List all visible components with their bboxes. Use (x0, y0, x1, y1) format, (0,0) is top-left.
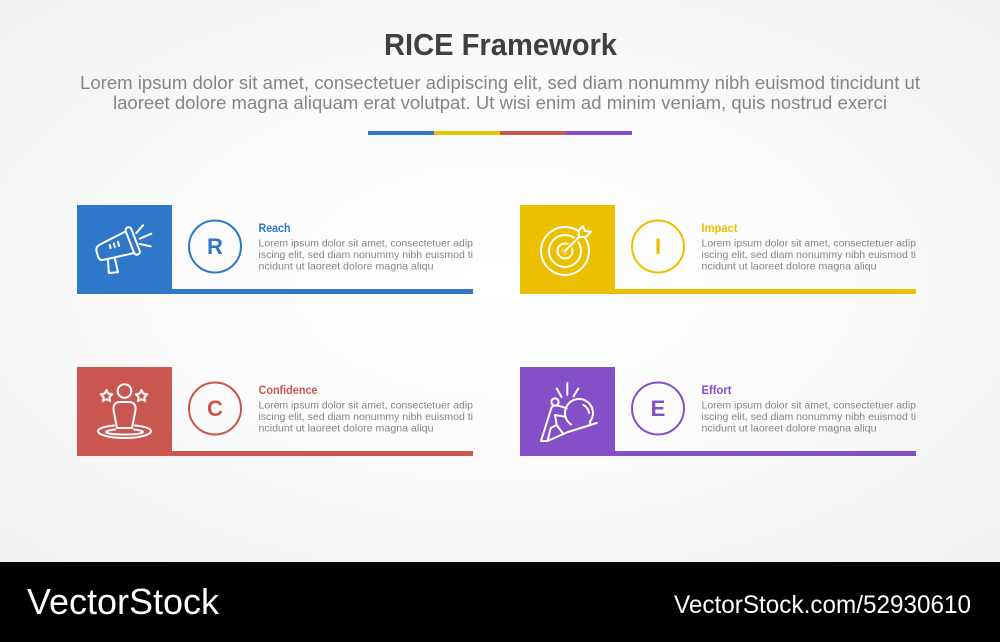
impact text: Lorem ipsum dolor sit amet, consectetuer adip (702, 238, 916, 250)
title: RICE Framework (384, 27, 618, 62)
subtitle text: Lorem ipsum dolor sit amet, consectetuer adipiscing elit, sed diam nonummy nibh euismod tincidunt ut (80, 72, 920, 93)
effort text: Lorem ipsum dolor sit amet, consectetuer adip (702, 400, 916, 412)
effort text: ncidunt ut laoreet dolore magna aliqu (702, 422, 877, 434)
footer url text: VectorStock.com/52930610 (674, 591, 971, 619)
letter circle C (189, 382, 241, 434)
icon: megaphone (96, 225, 151, 273)
letter circle E (632, 382, 684, 434)
subtitle text (80, 72, 920, 113)
effort colour block and bar (520, 367, 916, 456)
reach text: Reach (258, 223, 290, 235)
letter circle C: C (207, 396, 223, 421)
effort text (702, 385, 916, 434)
impact text: Impact (702, 223, 738, 235)
confidence text: Confidence (258, 385, 318, 397)
panel: impact (520, 205, 916, 294)
colour divider (368, 131, 632, 135)
impact text (702, 223, 916, 272)
confidence text: iscing elit, sed diam nonummy nibh euismod ti (258, 411, 473, 423)
confidence text: ncidunt ut laoreet dolore magna aliqu (258, 422, 434, 434)
panel: reach (77, 205, 473, 294)
letter circle R (189, 220, 241, 272)
impact text: iscing elit, sed diam nonummy nibh euismod ti (702, 249, 916, 261)
reach text: iscing elit, sed diam nonummy nibh euismod ti (258, 249, 473, 261)
impact colour block and bar (520, 205, 916, 294)
panel: confidence (77, 367, 473, 456)
reach colour block and bar (77, 205, 473, 294)
letter circle R: R (207, 234, 223, 259)
confidence text: Lorem ipsum dolor sit amet, consectetuer adip (258, 400, 473, 412)
effort text: Effort (702, 385, 732, 397)
letter circle I: I (655, 234, 661, 259)
icon: target (541, 226, 591, 275)
reach text: ncidunt ut laoreet dolore magna aliqu (258, 260, 434, 272)
reach text: Lorem ipsum dolor sit amet, consectetuer adip (258, 238, 473, 250)
confidence colour block and bar (77, 367, 473, 456)
icon: person with stars (98, 384, 151, 438)
footer logo text: VectorStock (27, 581, 220, 622)
footer watermark bar (0, 562, 1000, 642)
effort text: iscing elit, sed diam nonummy nibh euismod ti (702, 411, 916, 423)
impact text: ncidunt ut laoreet dolore magna aliqu (702, 260, 877, 272)
panel: effort (520, 367, 916, 456)
icon: person pushing boulder (541, 383, 597, 441)
subtitle text: laoreet dolore magna aliquam erat volutpat. Ut wisi enim ad minim veniam, quis nostrud exerci (113, 92, 887, 113)
letter circle I (632, 220, 684, 272)
reach text (258, 223, 473, 272)
letter circle E: E (651, 396, 665, 421)
confidence text (258, 385, 473, 434)
